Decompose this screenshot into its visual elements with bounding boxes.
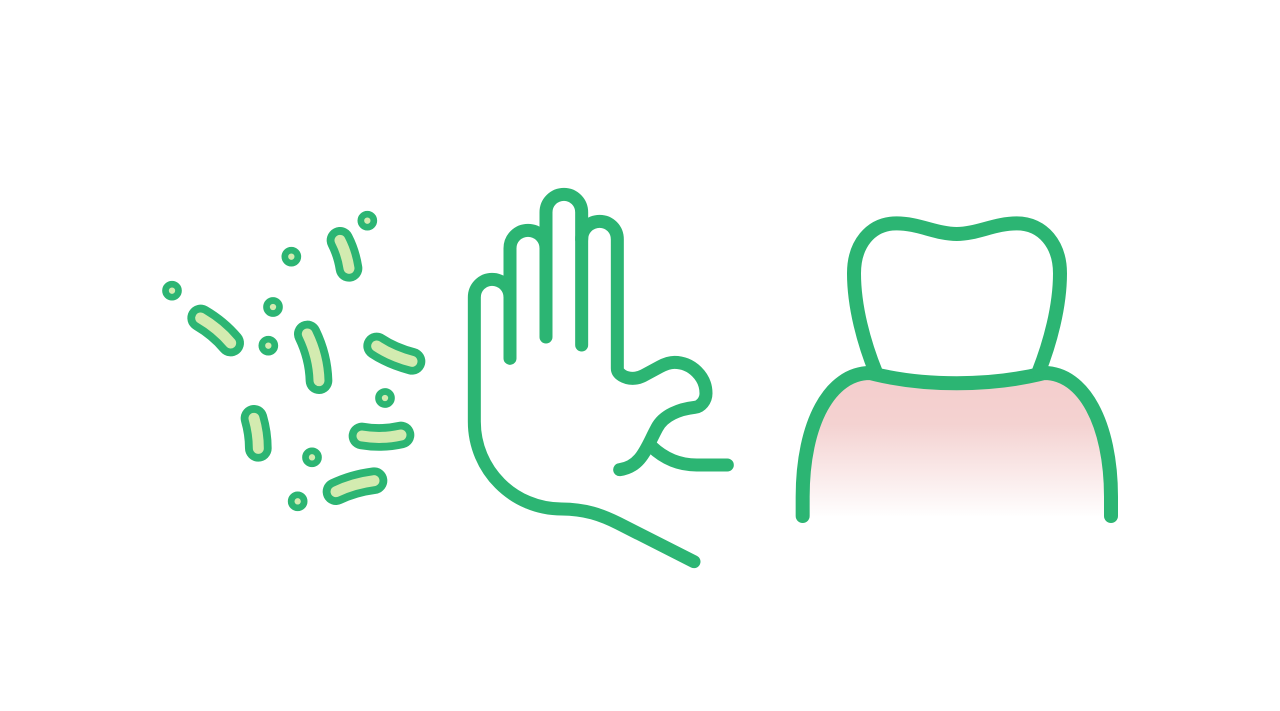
- hand: middle finger: [546, 194, 582, 345]
- icon: raised hand: [474, 194, 727, 562]
- icon: tooth and gum: [803, 223, 1111, 516]
- tooth: crown outline: [854, 223, 1060, 373]
- bacteria: light rod centres: [201, 240, 412, 492]
- icon: bacteria cluster: [165, 214, 412, 508]
- gum: outline: [803, 373, 1111, 516]
- bacteria: dark rod outlines: [201, 240, 412, 492]
- hand: index finger and thumb: [582, 221, 706, 470]
- hand: thumb crease: [652, 447, 727, 465]
- hand: ring finger: [510, 230, 546, 337]
- hand: pinky, palm edge and wrist: [474, 279, 694, 562]
- gum: pink gradient fill: [803, 373, 1111, 516]
- bacteria: round spores: [165, 214, 391, 508]
